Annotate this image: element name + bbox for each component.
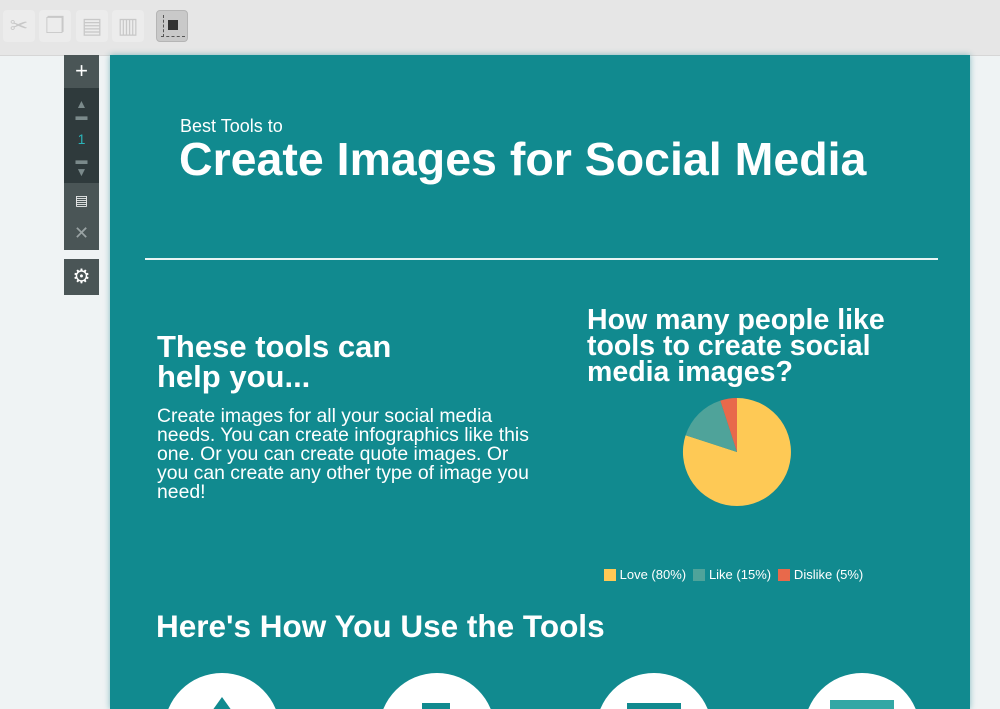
subtitle: Best Tools to — [180, 116, 283, 136]
text block: description: one. Or you can create quote images. Or — [157, 443, 508, 465]
panel: infographic — [110, 55, 970, 709]
button: duplicate — [64, 183, 99, 217]
icon: copy — [39, 10, 71, 42]
icon: delete — [112, 10, 144, 42]
icon circles row — [168, 673, 916, 709]
button: add: + — [75, 58, 88, 83]
page order control: ▼ — [76, 165, 87, 179]
title: Create Images for Social Media — [179, 133, 866, 185]
text block: description — [157, 405, 529, 503]
button: remove — [64, 217, 99, 250]
page order control: 1 — [78, 131, 85, 147]
heading: these tools can help — [157, 329, 391, 394]
text block: description: you can create any other type of image you — [157, 462, 529, 484]
icon: paste: ▤ — [82, 13, 102, 38]
icon: step 1 — [164, 673, 280, 709]
text block: description: need! — [157, 481, 206, 503]
page order control: ▬ — [76, 109, 88, 123]
button: add — [64, 55, 99, 88]
heading: pie question: tools to create social — [587, 330, 871, 362]
button: remove: ✕ — [74, 223, 89, 243]
heading: pie question: How many people like — [587, 304, 885, 336]
button: settings: ⚙ — [73, 266, 90, 288]
legend: Love (80%) Like (15%) Dislike (5%) — [620, 567, 863, 582]
toolbar — [0, 0, 1000, 56]
text block: description: Create images for all your social media — [157, 405, 492, 427]
heading: these tools can help: These tools can — [157, 329, 391, 364]
heading: pie question: media images? — [587, 356, 793, 388]
heading: pie question — [587, 304, 885, 388]
icon: copy: ❐ — [45, 13, 65, 38]
sidebar controls — [64, 55, 99, 295]
button: settings — [64, 259, 99, 295]
page order control: ▬ — [76, 153, 88, 167]
icon: cut: ✂ — [10, 13, 28, 38]
heading: these tools can help: help you... — [157, 359, 310, 394]
icon: layout toggle — [156, 10, 188, 42]
text block: description: needs. You can create infographics like this — [157, 424, 529, 446]
page order control — [64, 88, 99, 183]
button: duplicate: ▤ — [75, 192, 88, 208]
icon: cut — [3, 10, 35, 42]
icon: step 3 — [596, 673, 712, 709]
pie chart — [682, 398, 791, 506]
page order control: ▲ — [76, 97, 87, 111]
icon: step 2 — [379, 673, 495, 709]
icon: delete: ▥ — [118, 13, 138, 38]
icon: step 4 — [804, 673, 920, 709]
icon: paste — [76, 10, 108, 42]
heading: how to use: Here's How You Use the Tools — [156, 608, 605, 644]
